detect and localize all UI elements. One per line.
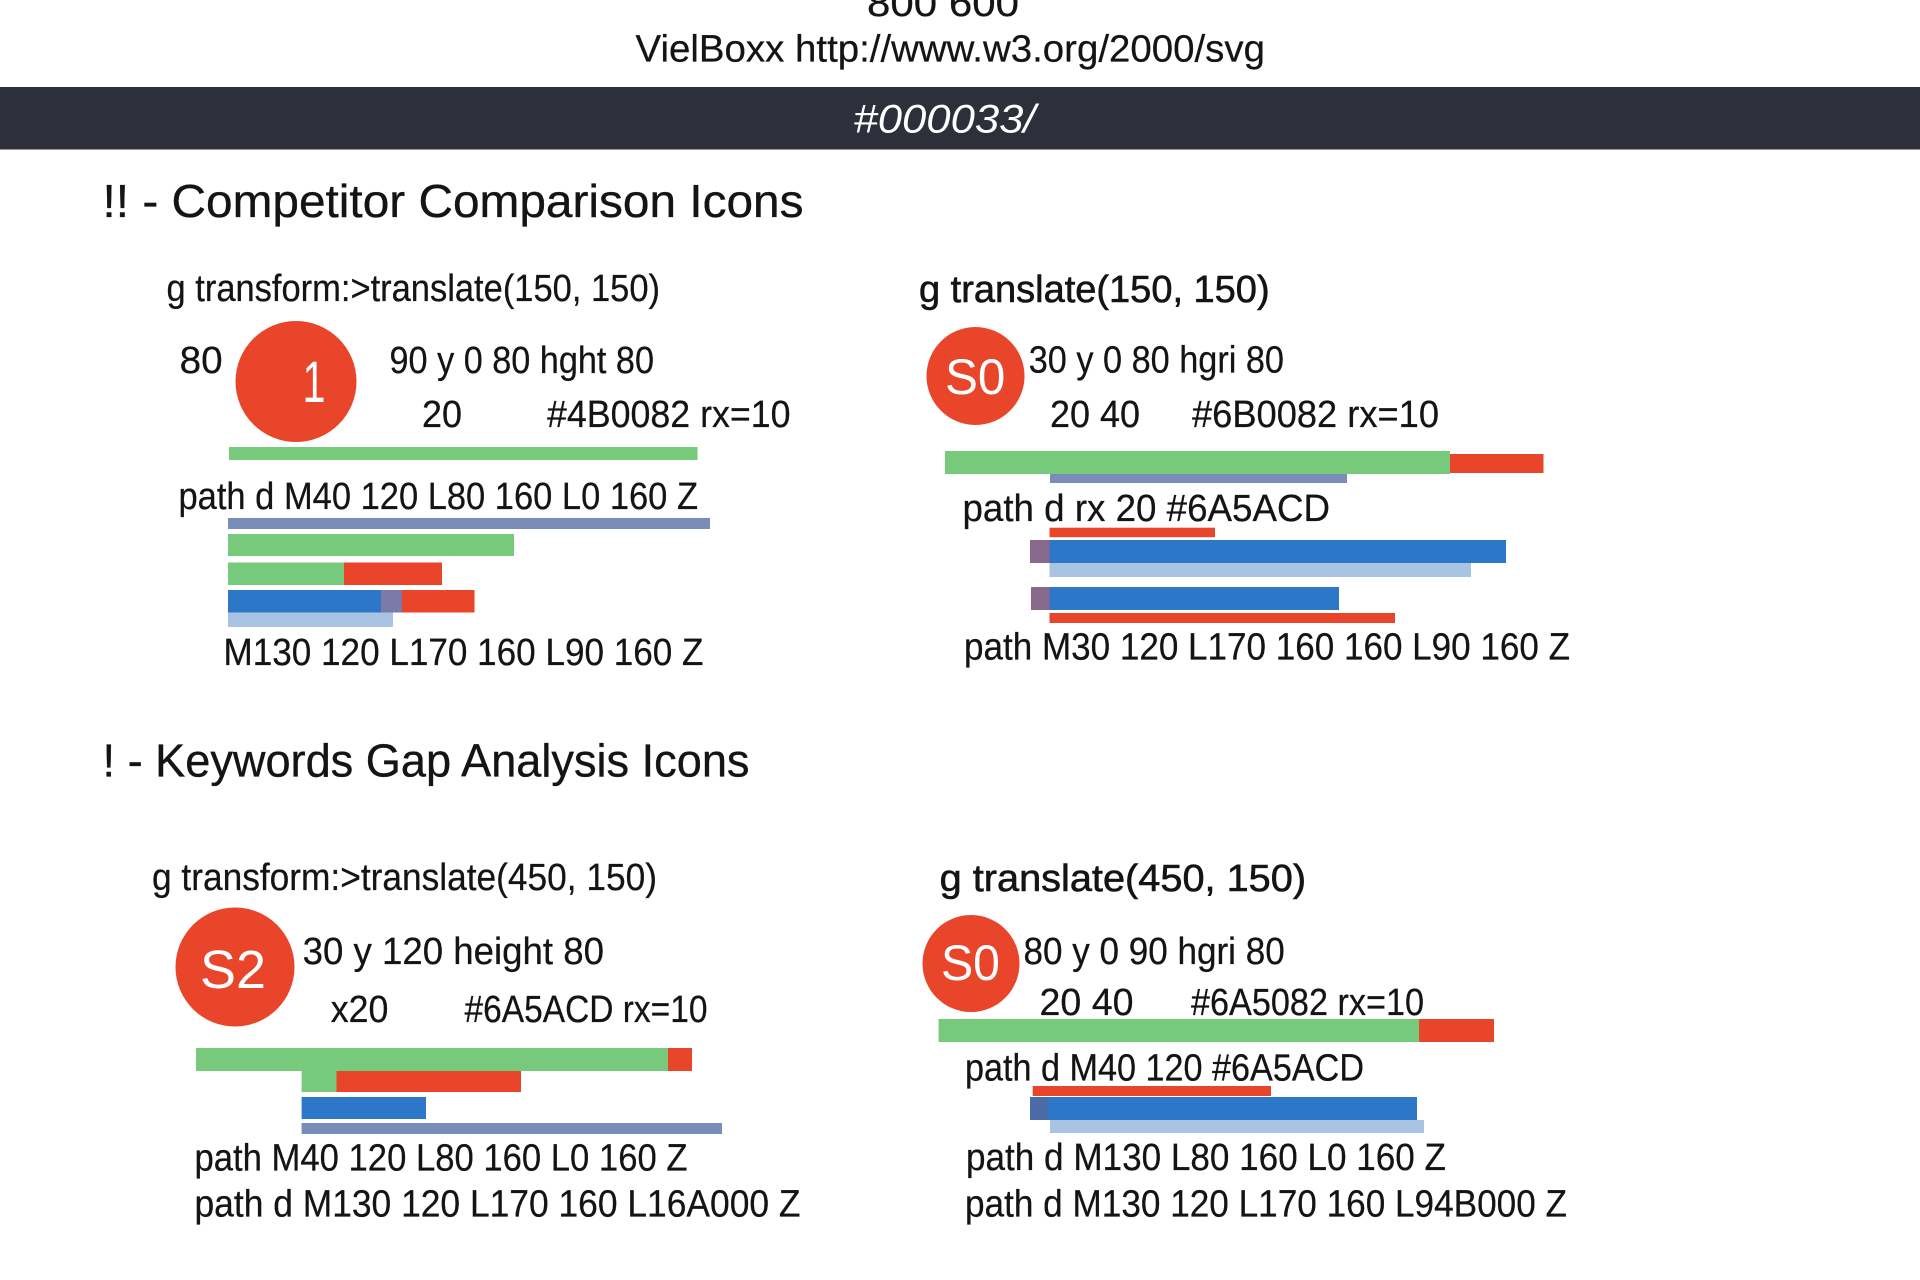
blue bar xyxy=(302,1097,426,1119)
colour attribute: #6A5082 rx=10 xyxy=(1191,982,1424,1024)
red bar xyxy=(1050,613,1395,623)
blue bar xyxy=(1050,540,1506,563)
header text xyxy=(636,0,1265,70)
light blue bar xyxy=(228,612,393,627)
heading: competitor comparison: !! - Competitor Comparison Icons xyxy=(102,175,804,227)
path label: path d M40 120 #6A5ACD xyxy=(965,1048,1364,1090)
mauve cap 2 xyxy=(1031,587,1050,610)
bar stack xyxy=(196,1048,722,1134)
attribute 20 40: 20 40 xyxy=(1040,982,1134,1024)
badge text: S0 xyxy=(945,349,1005,405)
badge: S0 xyxy=(922,915,1020,1012)
red bar xyxy=(336,1071,521,1092)
green bar xyxy=(196,1048,668,1071)
red tip xyxy=(1450,454,1544,473)
path label: path M40 120 L80 160 L0 160 Z xyxy=(194,1138,688,1180)
overlap segment xyxy=(381,590,402,612)
badge: S0 xyxy=(926,327,1024,425)
path label: path d M40 120 L80 160 L0 160 Z xyxy=(178,476,698,518)
path label 3: path d M130 120 L170 160 L94B000 Z xyxy=(965,1184,1567,1226)
badge circle xyxy=(236,321,356,442)
band label: #000033/ xyxy=(854,98,1040,142)
badge number: 1 xyxy=(302,350,326,415)
path label 2: path d M130 120 L170 160 L16A000 Z xyxy=(194,1184,800,1226)
mauve cap xyxy=(1030,540,1050,563)
attribute line 1: 90 y 0 80 hght 80 xyxy=(390,340,654,382)
path label: path d rx 20 #6A5ACD xyxy=(962,488,1330,530)
colour attribute: #6B0082 rx=10 xyxy=(1192,394,1439,436)
badge circle xyxy=(922,915,1020,1012)
colour attribute: #4B0082 rx=10 xyxy=(547,394,790,436)
band background xyxy=(0,87,1920,150)
green bar short xyxy=(228,562,344,585)
dark title band xyxy=(0,87,1920,150)
badge text: S0 xyxy=(941,935,1000,991)
light blue bar xyxy=(1050,1120,1424,1133)
badge text: S2 xyxy=(200,940,266,1000)
green bar xyxy=(939,1019,1419,1042)
panel title: g transform:>translate(150, 150) xyxy=(166,268,660,310)
attribute line 1: 30 y 120 height 80 xyxy=(303,931,604,973)
red segment xyxy=(402,590,474,612)
label 80: 80 xyxy=(180,340,223,382)
path label 2: M130 120 L170 160 L90 160 Z xyxy=(224,632,704,674)
red tip xyxy=(1419,1019,1494,1042)
attribute x20: x20 xyxy=(331,989,388,1031)
badge circle xyxy=(176,908,294,1026)
top bars xyxy=(945,451,1544,483)
green bar xyxy=(229,447,698,460)
thin red bar xyxy=(1050,528,1215,537)
green bar long xyxy=(228,534,514,556)
badge: 1 xyxy=(236,321,356,442)
light blue bar xyxy=(1050,563,1471,577)
slate bar xyxy=(302,1123,722,1134)
red tip xyxy=(668,1048,692,1071)
green bar xyxy=(945,451,1450,474)
colour attribute: #6A5ACD rx=10 xyxy=(464,989,708,1031)
panel: competitor icon 2 xyxy=(919,269,1570,668)
badge: S2 xyxy=(176,908,294,1026)
blue bar xyxy=(1048,1097,1417,1120)
badge circle xyxy=(926,327,1024,425)
thin red bar xyxy=(1033,1086,1271,1096)
bar stack xyxy=(228,518,710,627)
path label 2: path d M130 L80 160 L0 160 Z xyxy=(966,1137,1446,1179)
blue bar 2 xyxy=(1050,587,1339,610)
panel title: g translate(150, 150) xyxy=(919,269,1270,311)
green stub xyxy=(302,1071,337,1092)
attribute 20 40: 20 40 xyxy=(1050,394,1140,436)
bar stack xyxy=(1030,528,1506,623)
panel title: g translate(450, 150) xyxy=(940,858,1306,900)
attribute line 1: 80 y 0 90 hgri 80 xyxy=(1024,931,1285,973)
top bar xyxy=(939,1019,1494,1042)
red bar xyxy=(344,562,442,585)
panel: keyword icon 1 xyxy=(152,857,800,1226)
blue bar xyxy=(228,590,381,612)
heading: keyword gap analysis: ! - Keywords Gap Analysis Icons xyxy=(102,734,750,786)
panel title: g transform:>translate(450, 150) xyxy=(152,857,657,899)
bar stack xyxy=(1030,1086,1424,1133)
overlap cap xyxy=(1030,1097,1048,1120)
slate bar xyxy=(1050,474,1347,483)
panel: keyword icon 2 xyxy=(922,858,1567,1226)
path label 2: path M30 120 L170 160 160 L90 160 Z xyxy=(964,626,1570,668)
slate bar xyxy=(228,518,710,529)
attribute 20: 20 xyxy=(422,394,462,436)
panel: competitor icon 1 xyxy=(166,268,790,674)
attribute line 1: 30 y 0 80 hgri 80 xyxy=(1029,340,1284,382)
viewbox label: VielBoxx http://www.w3.org/2000/svg xyxy=(636,28,1265,70)
